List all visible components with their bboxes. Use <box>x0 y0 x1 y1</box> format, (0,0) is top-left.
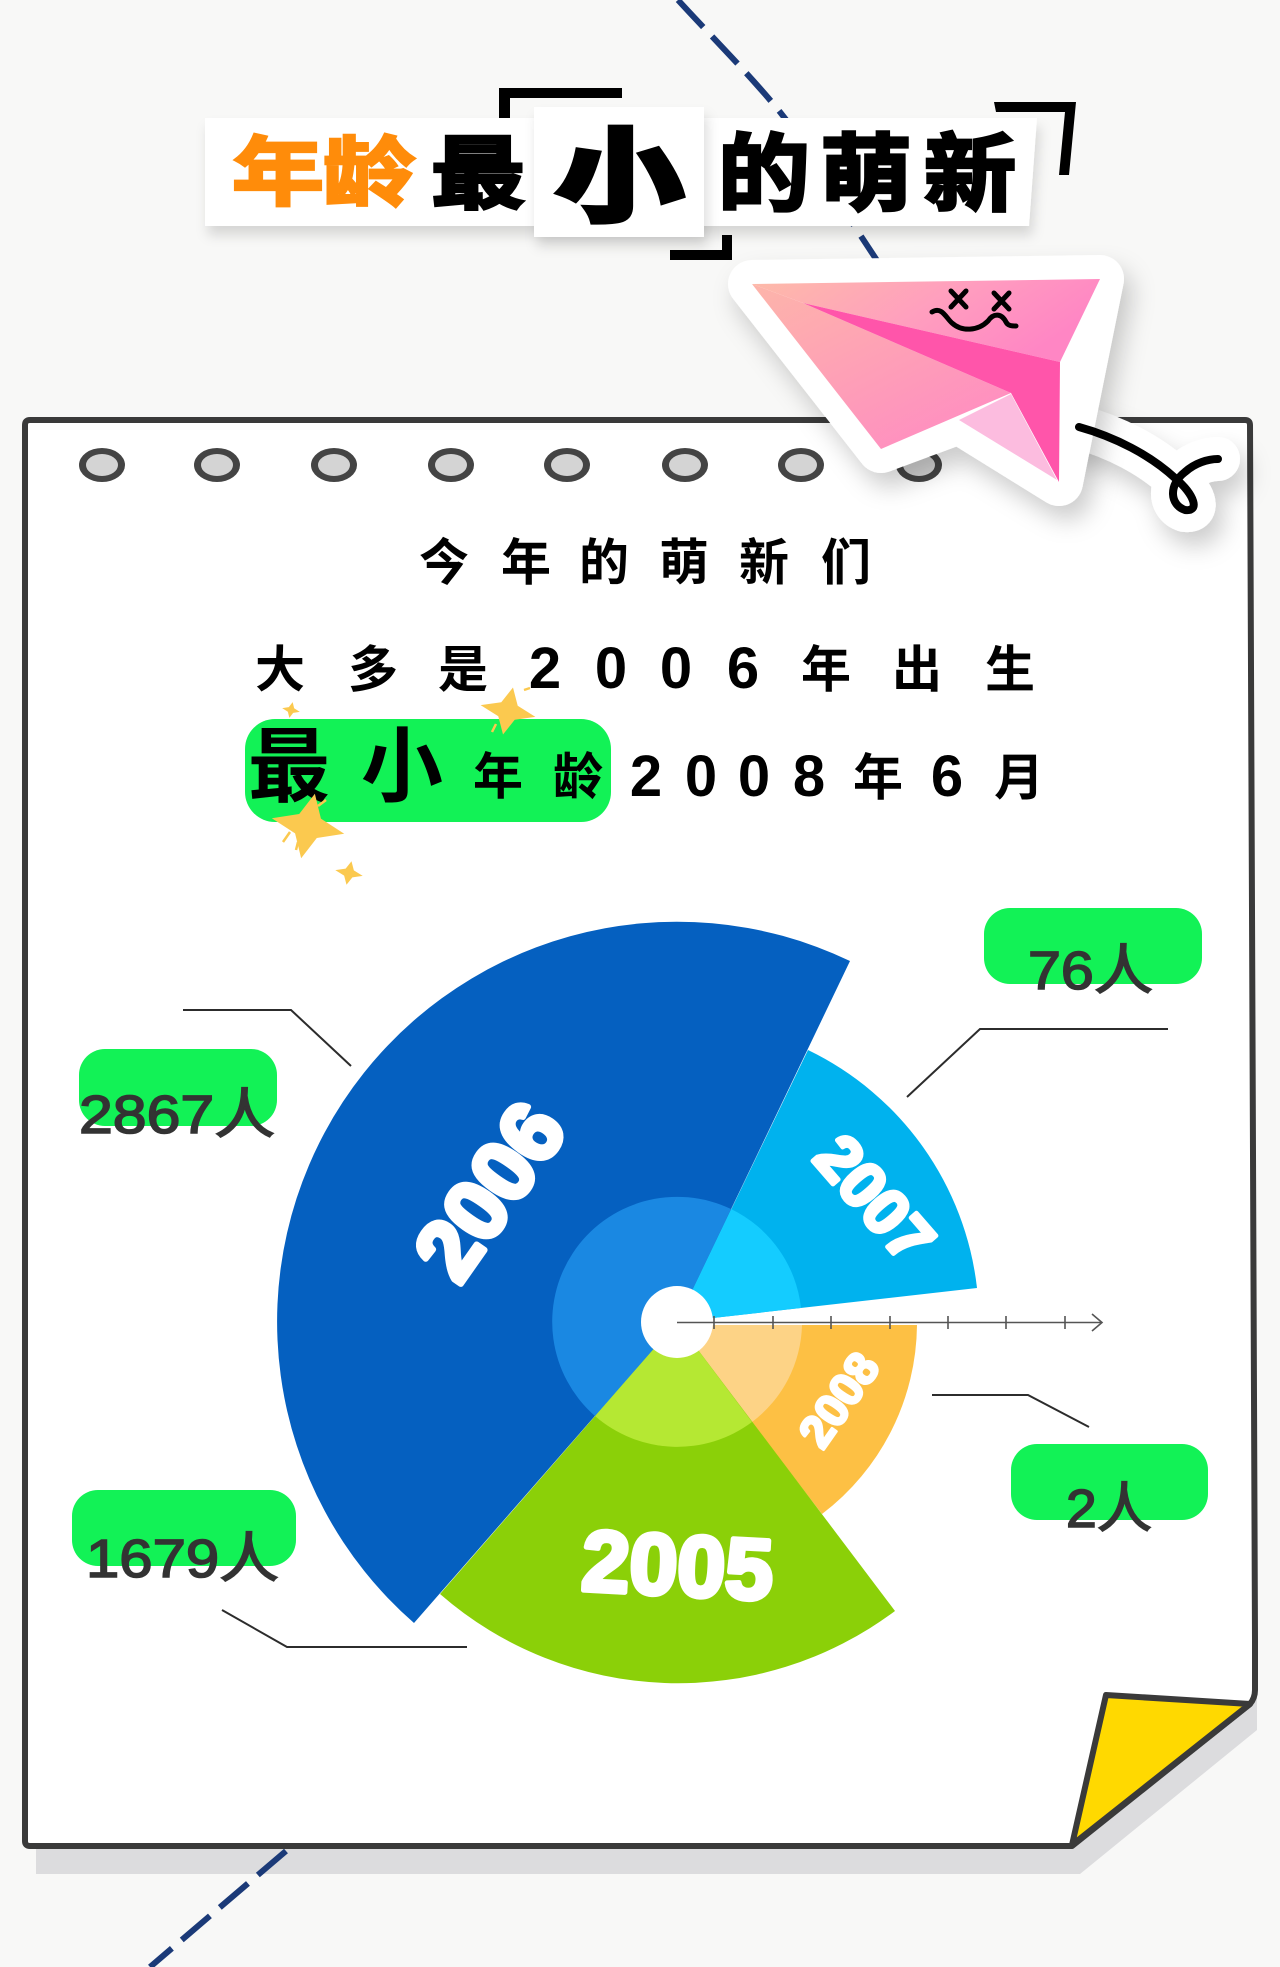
label 2008: 2008 <box>788 1343 890 1457</box>
paper plane sticker <box>752 279 1100 482</box>
dashed flight path: bottom <box>150 1851 286 1967</box>
title highlight box <box>534 107 704 237</box>
body text line 2: 年出生 <box>801 642 1035 698</box>
dashed flight path: top <box>678 0 878 262</box>
body text line 1: 今年的萌新们 <box>419 535 871 591</box>
callout: 1679人: 1679人 <box>86 1529 279 1589</box>
callout: 2人 <box>1011 1444 1208 1539</box>
page corner fold <box>1072 1695 1250 1845</box>
title text: 最: 最 <box>431 131 525 219</box>
sparkle stars <box>265 682 540 888</box>
chart: nightingale rose of birth years <box>277 922 1102 1683</box>
title strip <box>205 118 1037 226</box>
wedge 2007 <box>677 1050 977 1322</box>
axis arrow <box>677 1314 1102 1331</box>
binder rings <box>79 448 942 482</box>
body text line 3: 年 <box>853 750 903 806</box>
body text line 3: 2008 <box>630 744 825 809</box>
plane top wing <box>752 279 1100 362</box>
title text: 年龄: 年龄 <box>232 131 415 215</box>
callout: 2867人 <box>79 1049 277 1145</box>
body text line 3: 年龄 <box>473 749 603 805</box>
leader line 2007 <box>907 1029 1168 1097</box>
body text line 3: 最小 <box>248 722 443 813</box>
callout: 76人: 76人 <box>1028 941 1153 1001</box>
plane left wing <box>752 284 1011 449</box>
wedge 2006 <box>277 922 850 1623</box>
body text line 2: 2006 <box>529 636 759 701</box>
wedge 2005 <box>440 1322 895 1683</box>
callout: 76人 <box>984 908 1202 1001</box>
highlight pill: 最小年龄 <box>245 719 611 822</box>
body text line 3 <box>248 722 1044 813</box>
body text line 3: 月 <box>994 750 1044 806</box>
plane squiggle <box>1079 427 1218 510</box>
panel: notebook page shadow <box>36 1690 1257 1874</box>
callout: 2867人: 2867人 <box>79 1085 275 1145</box>
plane fold <box>803 303 1060 482</box>
title text: 小: 小 <box>557 122 683 233</box>
plane under fold <box>959 394 1057 480</box>
plane outline <box>752 279 1100 482</box>
title brackets <box>499 88 1076 260</box>
panel: notebook page <box>25 420 1255 1846</box>
label 2007: 2007 <box>801 1121 948 1276</box>
callout: 1679人 <box>72 1490 296 1589</box>
body text line 3: 6 <box>931 744 963 809</box>
leader line 2005 <box>222 1610 467 1647</box>
plane face <box>932 291 1016 329</box>
chart hub <box>641 1286 713 1358</box>
body text line 2: 大多是 <box>255 642 488 698</box>
title text: 的萌新: 的萌新 <box>718 127 1016 222</box>
callout: 2人: 2人 <box>1066 1479 1152 1539</box>
label 2005: 2005 <box>579 1513 776 1619</box>
label 2006: 2006 <box>396 1085 584 1297</box>
paper plane squiggle halo <box>1079 427 1218 510</box>
leader line 2006 <box>183 1010 351 1066</box>
title banner <box>205 107 1037 237</box>
wedge 2008 <box>677 1325 917 1514</box>
leader line 2008 <box>932 1395 1089 1427</box>
body text line 2 <box>255 636 1035 701</box>
